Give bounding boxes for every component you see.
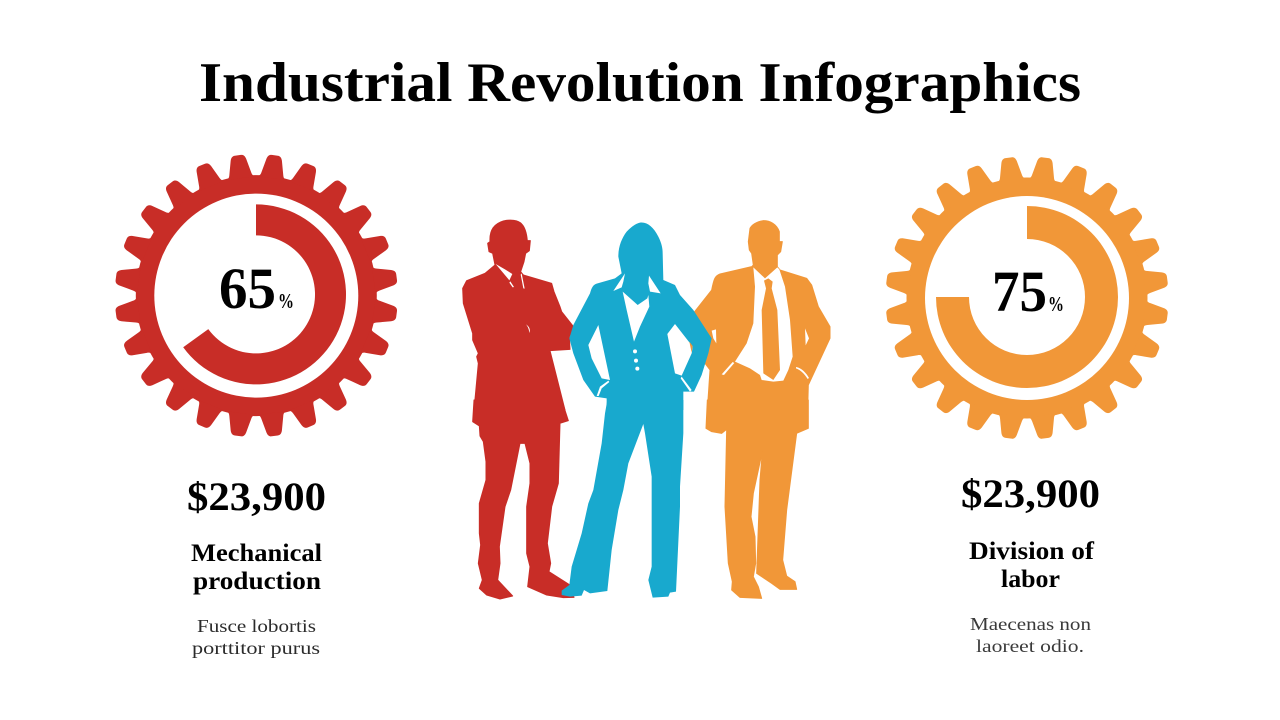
description: [192, 616, 320, 658]
heading: [969, 538, 1095, 593]
description: porttitor purus: [192, 638, 320, 658]
gauge value: 75 percent: %: [1048, 292, 1064, 316]
panel: division of labor: [885, 156, 1169, 656]
heading: labor: [1001, 566, 1060, 593]
amount: $23,900: [187, 474, 326, 519]
silhouette: blue woman: [562, 223, 712, 598]
description: Maecenas non: [970, 614, 1091, 634]
silhouette: red man: [463, 220, 574, 599]
gauge value: 65 percent: 65: [219, 256, 276, 321]
heading: production: [193, 568, 321, 595]
panel: mechanical production: [114, 153, 399, 658]
illustration: three business people silhouettes: [463, 220, 830, 599]
gauge value: 75 percent: 75: [992, 259, 1047, 324]
heading: Mechanical: [191, 540, 322, 567]
icon: orange gear with 75 percent donut: [885, 156, 1169, 440]
gauge value: 65 percent: %: [278, 289, 294, 313]
heading: [191, 540, 322, 595]
icon: red gear with 65 percent donut: [114, 153, 399, 438]
title: Industrial Revolution Infographics: [199, 52, 1081, 114]
description: [970, 614, 1091, 656]
amount: $23,900: [961, 471, 1100, 516]
silhouette: orange man: [693, 221, 830, 598]
heading: Division of: [969, 538, 1095, 565]
description: laoreet odio.: [976, 636, 1084, 656]
description: Fusce lobortis: [197, 616, 316, 636]
